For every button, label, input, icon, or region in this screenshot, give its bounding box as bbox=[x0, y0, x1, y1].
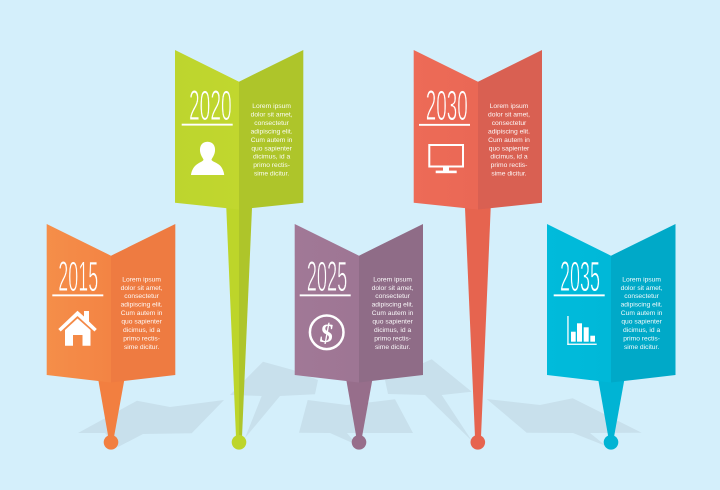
marker: 2030: 2030 bbox=[426, 82, 468, 130]
marker: 2015: 2015 bbox=[58, 253, 98, 301]
text block: Cum autem in bbox=[488, 137, 530, 144]
text block: consectetur bbox=[624, 293, 660, 300]
text block: primo rectis- bbox=[491, 162, 527, 169]
text block: consectetur bbox=[124, 293, 160, 300]
green pin stem shade bbox=[239, 208, 252, 437]
ground shadows bbox=[78, 359, 642, 447]
orange left panel bbox=[47, 224, 111, 382]
text block: consectetur bbox=[254, 120, 290, 127]
marker: 2025 bbox=[295, 224, 423, 450]
red pin stem bbox=[465, 208, 491, 437]
text block: dicimus, id a bbox=[253, 154, 290, 161]
text block: adipiscing elit. bbox=[372, 302, 414, 309]
text block: quo sapienter bbox=[251, 145, 293, 152]
text block: Cum autem in bbox=[121, 310, 163, 317]
marker: 2015 bbox=[47, 224, 175, 450]
text block: dicimus, id a bbox=[623, 327, 660, 334]
text block: primo rectis- bbox=[123, 335, 160, 342]
text block: quo sapienter bbox=[121, 319, 163, 326]
orange pin stem bbox=[98, 380, 124, 437]
text block: adipiscing elit. bbox=[251, 128, 293, 135]
marker: 2025: 2025 bbox=[307, 253, 347, 301]
green left panel bbox=[175, 50, 239, 210]
marker: 2035 bbox=[547, 224, 676, 450]
text block: Lorem ipsum bbox=[122, 276, 161, 283]
icon: dollar coin: $ bbox=[319, 319, 333, 348]
text block: sime dicitur. bbox=[375, 344, 410, 351]
marker: 2020: 2020 bbox=[189, 82, 232, 130]
icon: monitor bbox=[428, 144, 464, 173]
icon: person bbox=[191, 142, 224, 175]
text block: dolor sit amet, bbox=[621, 285, 663, 292]
text block: primo rectis- bbox=[253, 162, 290, 169]
red right panel bbox=[478, 50, 542, 210]
orange pin dot bbox=[104, 435, 118, 450]
blue pin stem bbox=[598, 380, 624, 437]
text block: sime dicitur. bbox=[491, 171, 527, 178]
text block: Cum autem in bbox=[372, 310, 414, 317]
marker: 2030 bbox=[414, 50, 542, 450]
orange right panel bbox=[111, 224, 175, 382]
text block: Lorem ipsum bbox=[622, 276, 661, 283]
purple pin stem bbox=[346, 380, 372, 437]
red pin dot bbox=[470, 435, 485, 450]
year underline bbox=[300, 294, 351, 296]
red left panel bbox=[414, 50, 478, 210]
text block: Cum autem in bbox=[251, 137, 293, 144]
blue left panel bbox=[547, 224, 611, 382]
marker: 2020 bbox=[175, 50, 303, 450]
text block: dolor sit amet, bbox=[488, 111, 530, 118]
icon: house bbox=[58, 311, 97, 346]
icon: dollar coin bbox=[310, 316, 344, 349]
text block: adipiscing elit. bbox=[488, 128, 530, 135]
text block: sime dicitur. bbox=[124, 344, 159, 351]
blue pin dot bbox=[604, 435, 618, 450]
purple left panel bbox=[295, 224, 359, 382]
text block: Lorem ipsum bbox=[252, 103, 291, 110]
text block: quo sapienter bbox=[489, 145, 530, 152]
green right panel bbox=[239, 50, 303, 210]
text block: primo rectis- bbox=[374, 335, 411, 342]
text block: dicimus, id a bbox=[374, 327, 411, 334]
purple right panel bbox=[359, 224, 423, 382]
icon: bar chart bbox=[567, 316, 597, 345]
year underline bbox=[52, 294, 103, 296]
year underline bbox=[182, 124, 233, 126]
text block: dolor sit amet, bbox=[372, 285, 414, 292]
text block: consectetur bbox=[492, 120, 527, 127]
text block: sime dicitur. bbox=[254, 171, 289, 178]
text block: adipiscing elit. bbox=[621, 302, 663, 309]
text block: primo rectis- bbox=[623, 335, 660, 342]
marker: 2035: 2035 bbox=[560, 253, 600, 301]
text block: dolor sit amet, bbox=[121, 285, 163, 292]
green pin dot bbox=[232, 435, 246, 450]
text block: Lorem ipsum bbox=[373, 276, 412, 283]
text block: quo sapienter bbox=[372, 319, 414, 326]
text block: quo sapienter bbox=[621, 319, 663, 326]
green pin stem bbox=[226, 208, 239, 437]
text block: sime dicitur. bbox=[624, 344, 659, 351]
blue right panel bbox=[611, 224, 676, 382]
text block: dicimus, id a bbox=[490, 154, 528, 161]
text block: dolor sit amet, bbox=[251, 111, 293, 118]
text block: adipiscing elit. bbox=[121, 302, 163, 309]
text block: Lorem ipsum bbox=[490, 103, 529, 110]
purple pin dot bbox=[352, 435, 366, 450]
text block: Cum autem in bbox=[621, 310, 663, 317]
text block: dicimus, id a bbox=[123, 327, 160, 334]
year underline bbox=[554, 294, 605, 296]
text block: consectetur bbox=[375, 293, 411, 300]
year underline bbox=[419, 124, 470, 126]
